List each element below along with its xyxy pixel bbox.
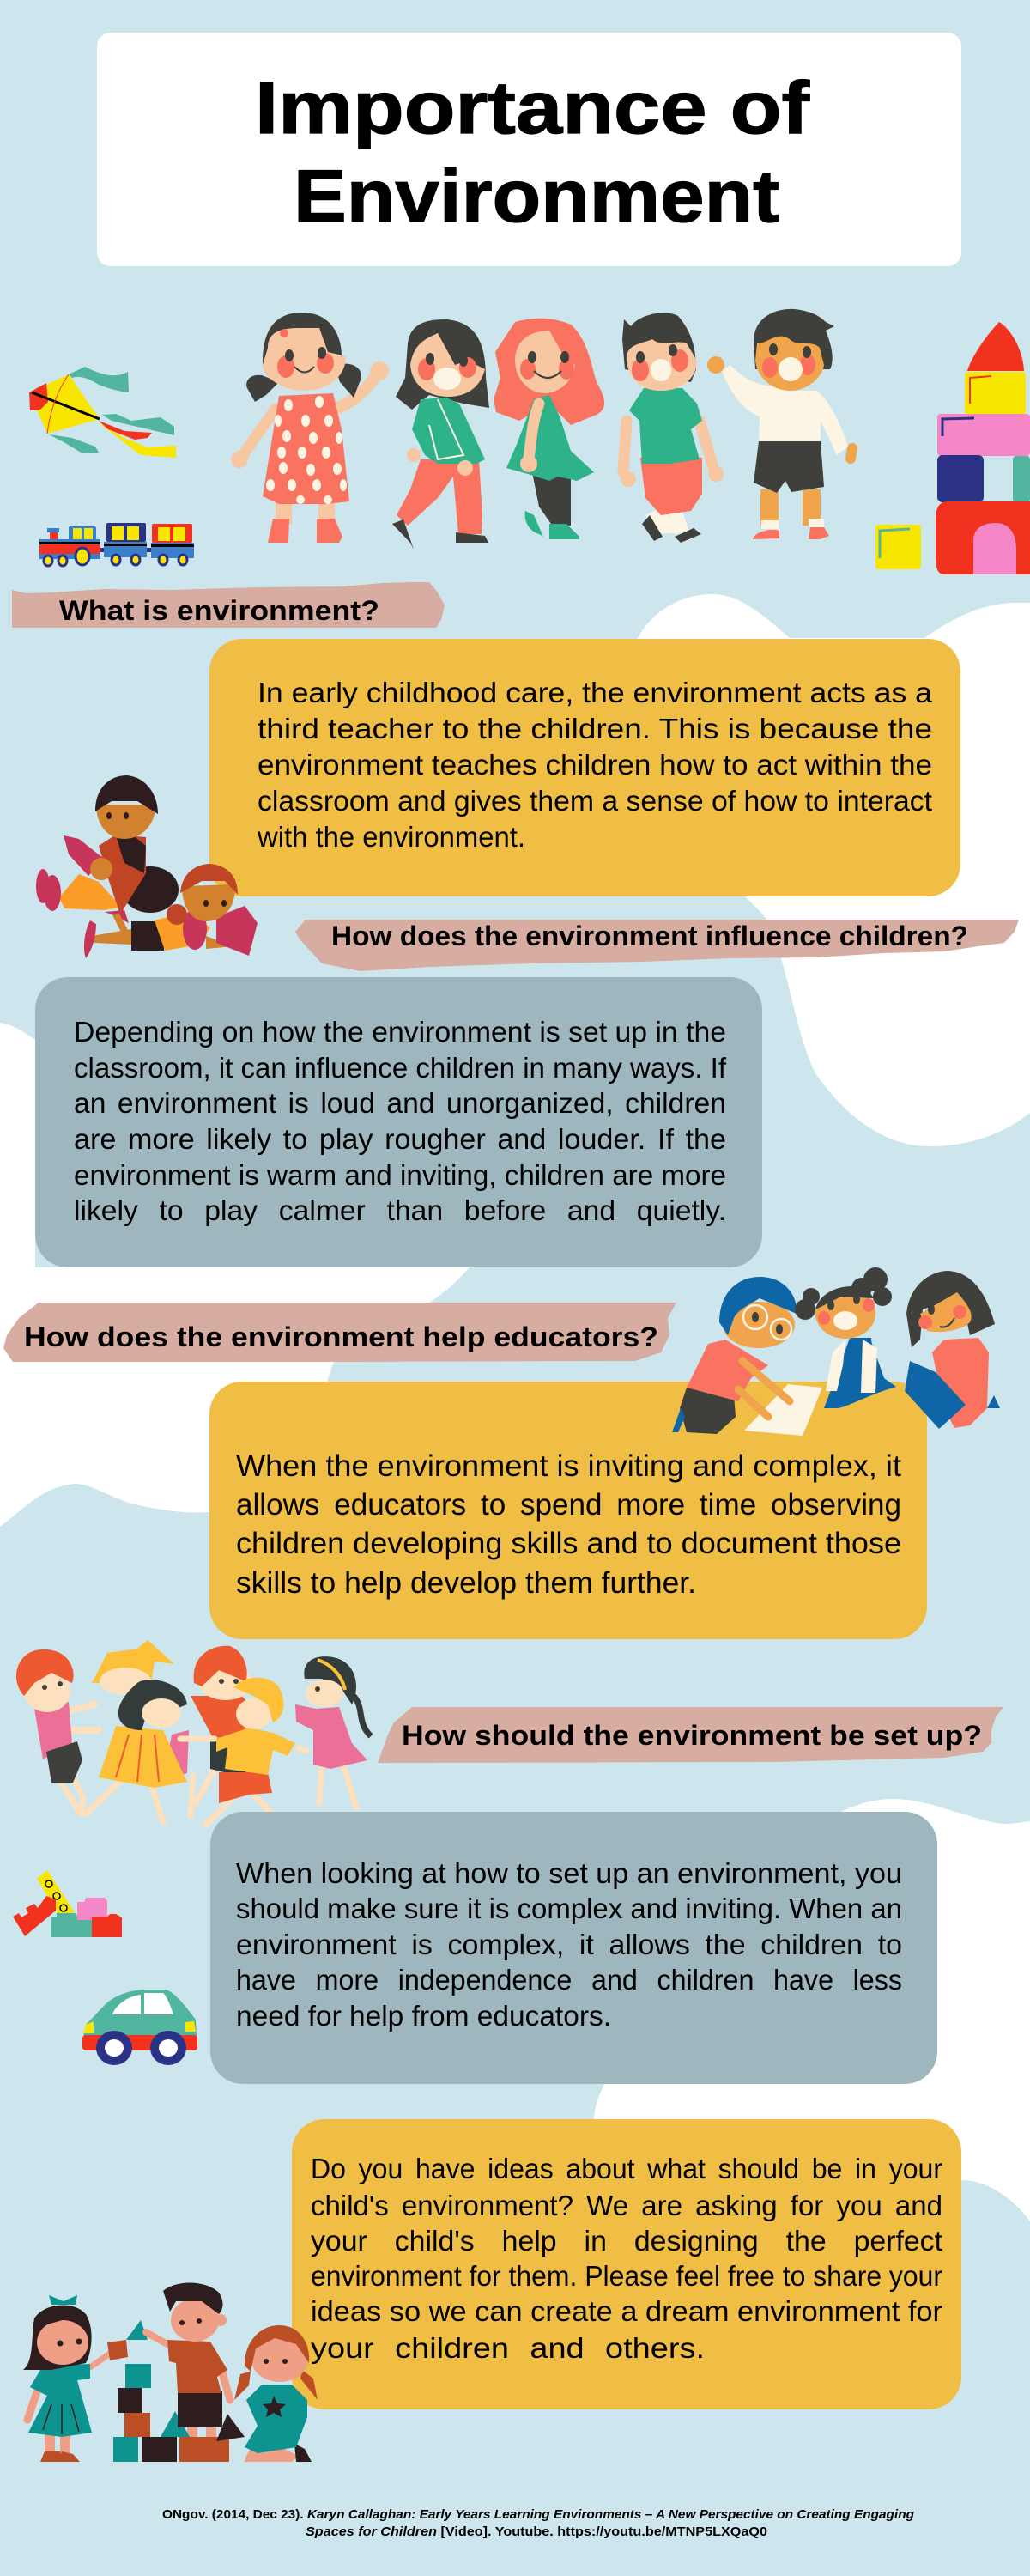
panel: how environment should be set up xyxy=(210,1812,937,2084)
citation footnote: Spaces for Children [Video]. Youtube. https://youtu.be/MTNP5LXQaQ0 xyxy=(306,2524,767,2539)
panel: call for ideas: child's environment? We are asking for you and xyxy=(311,2190,942,2221)
panel: call for ideas: ideas so we can create a dream environment for xyxy=(311,2295,942,2327)
panel: what is environment: classroom and gives them a sense of how to interact xyxy=(258,785,932,817)
title box: Importance of xyxy=(255,67,809,149)
heading bar: How should the environment be set up? xyxy=(378,1707,1003,1763)
heading bar: How does the environment influence children? xyxy=(295,920,1019,971)
illustration: boy in cream shirt xyxy=(707,309,852,539)
heading bar: How does the environment help educators? xyxy=(3,1303,676,1362)
illustration: boy in green shirt xyxy=(621,313,724,543)
panel: what is environment: In early childhood care, the environment acts as a xyxy=(258,677,933,708)
heading bar: How does the environment influence children?: How does the environment influence children? xyxy=(331,920,968,951)
illustration: children reading books xyxy=(36,775,258,958)
panel: what is environment: third teacher to the children. This is because the xyxy=(258,713,932,744)
icon: toy car xyxy=(82,1990,197,2065)
illustration: children drawing together xyxy=(672,1267,1000,1436)
illustration: girl in polka dot dress xyxy=(231,313,389,543)
panel: how environment helps educators: skills to help develop them further. xyxy=(236,1566,696,1600)
title box: Environment xyxy=(294,155,779,238)
panel: call for ideas xyxy=(292,2119,961,2409)
panel: how environment influences children: classroom, it can influence children in many ways. If xyxy=(74,1052,727,1084)
icon: kite xyxy=(29,367,176,458)
panel: how environment influences children: an environment is loud and unorganized, children xyxy=(74,1087,726,1119)
panel: how environment helps educators xyxy=(209,1382,927,1639)
panel: how environment should be set up: environment is complex, it allows the children to xyxy=(236,1929,902,1960)
panel: how environment helps educators: When the environment is inviting and complex, it xyxy=(236,1449,901,1483)
panel: how environment should be set up: When looking at how to set up an environment, you xyxy=(236,1857,902,1889)
panel: how environment should be set up: need for help from educators. xyxy=(236,2000,611,2032)
illustration: children building with blocks xyxy=(23,2282,318,2462)
icon: toy train xyxy=(39,523,194,566)
icon: toy bricks xyxy=(13,1870,122,1937)
panel: call for ideas: your child's help in designing the perfect xyxy=(311,2225,942,2257)
panel: call for ideas: environment for them. Please feel free to share your xyxy=(311,2260,942,2292)
icon: toy block tower xyxy=(876,322,1030,574)
panel: how environment influences children: are more likely to play rougher and louder. If the xyxy=(74,1123,726,1155)
heading bar: What is environment? xyxy=(12,582,445,628)
panel: how environment should be set up: have more independence and children have less xyxy=(236,1964,902,1996)
citation footnote xyxy=(162,2507,914,2539)
heading bar: How should the environment be set up?: How should the environment be set up? xyxy=(402,1720,982,1751)
panel: call for ideas: Do you have ideas about what should be in your xyxy=(311,2153,942,2184)
panel: what is environment xyxy=(209,639,960,896)
panel: how environment influences children: likely to play calmer than before and quietly. xyxy=(74,1194,726,1226)
title box xyxy=(97,33,961,266)
panel: how environment influences children: environment is warm and inviting, children are more xyxy=(74,1159,726,1191)
heading bar: What is environment?: What is environment? xyxy=(59,595,379,626)
illustration: girl with coral hair xyxy=(494,319,604,539)
panel: what is environment: with the environment. xyxy=(257,821,525,853)
panel: what is environment: environment teaches children how to act within the xyxy=(258,749,932,781)
heading bar: How does the environment help educators?: How does the environment help educators? xyxy=(24,1321,658,1352)
panel: how environment helps educators: allows educators to spend more time observing xyxy=(236,1488,901,1522)
illustration: child in green sweater xyxy=(392,319,489,550)
panel: how environment influences children: Depending on how the environment is set up in the xyxy=(74,1016,726,1048)
illustration: children dancing in a circle xyxy=(16,1640,371,1827)
citation footnote: ONgov. (2014, Dec 23). Karyn Callaghan: Early Years Learning Environments – A New Perspective on Creating Engaging xyxy=(162,2507,914,2522)
panel: call for ideas: your children and others. xyxy=(311,2332,705,2364)
panel: how environment influences children xyxy=(35,977,762,1267)
panel: how environment helps educators: children developing skills and to document those xyxy=(236,1527,901,1560)
panel: how environment should be set up: should make sure it is complex and inviting. When an xyxy=(236,1893,902,1924)
